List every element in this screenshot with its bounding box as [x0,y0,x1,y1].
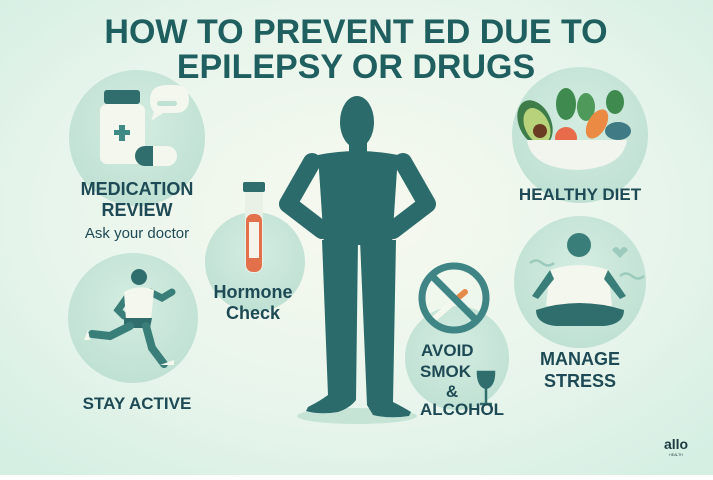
icon: pill bottle [100,85,189,166]
panel: medication review [69,70,205,242]
label: avoid smoking & alcohol: SMOK [420,362,472,381]
label: manage stress: MANAGE [540,349,620,369]
icon: no smoking [422,266,486,330]
icon: runner [84,269,174,365]
title: EPILEPSY OR DRUGS [177,48,535,86]
logo: allo health: HEALTH [669,453,683,457]
label: medication review: MEDICATION [81,179,193,199]
panel: hormone check [205,182,305,323]
title [104,13,608,86]
label: stay active: STAY ACTIVE [83,394,191,413]
label: avoid smoking & alcohol: & [446,382,458,401]
label: avoid smoking & alcohol: AVOID [421,341,474,360]
icon: salad bowl [510,88,631,170]
icon: wine glass [478,372,494,404]
label: hormone check: Hormone [213,282,293,302]
panel: healthy diet [510,67,648,204]
label: avoid smoking & alcohol [420,341,504,419]
label: medication review [81,179,193,242]
label: avoid smoking & alcohol: ALCOHOL [420,400,504,419]
panel: avoid smoking & alcohol [405,266,509,419]
logo: allo health: allo [664,436,688,452]
label: manage stress [540,349,620,391]
label: hormone check: Check [226,303,281,323]
title: HOW TO PREVENT ED DUE TO [104,13,608,51]
figure: man silhouette [288,96,427,424]
icon: test tube [243,182,265,273]
label: healthy diet: HEALTHY DIET [519,185,642,204]
label: medication review: REVIEW [101,200,173,220]
label: hormone check [213,282,293,323]
label: manage stress: STRESS [544,371,616,391]
panel: manage stress [514,216,646,391]
label: medication review: Ask your doctor [85,225,189,242]
panel: stay active [68,253,198,413]
icon: meditating person [530,233,644,326]
